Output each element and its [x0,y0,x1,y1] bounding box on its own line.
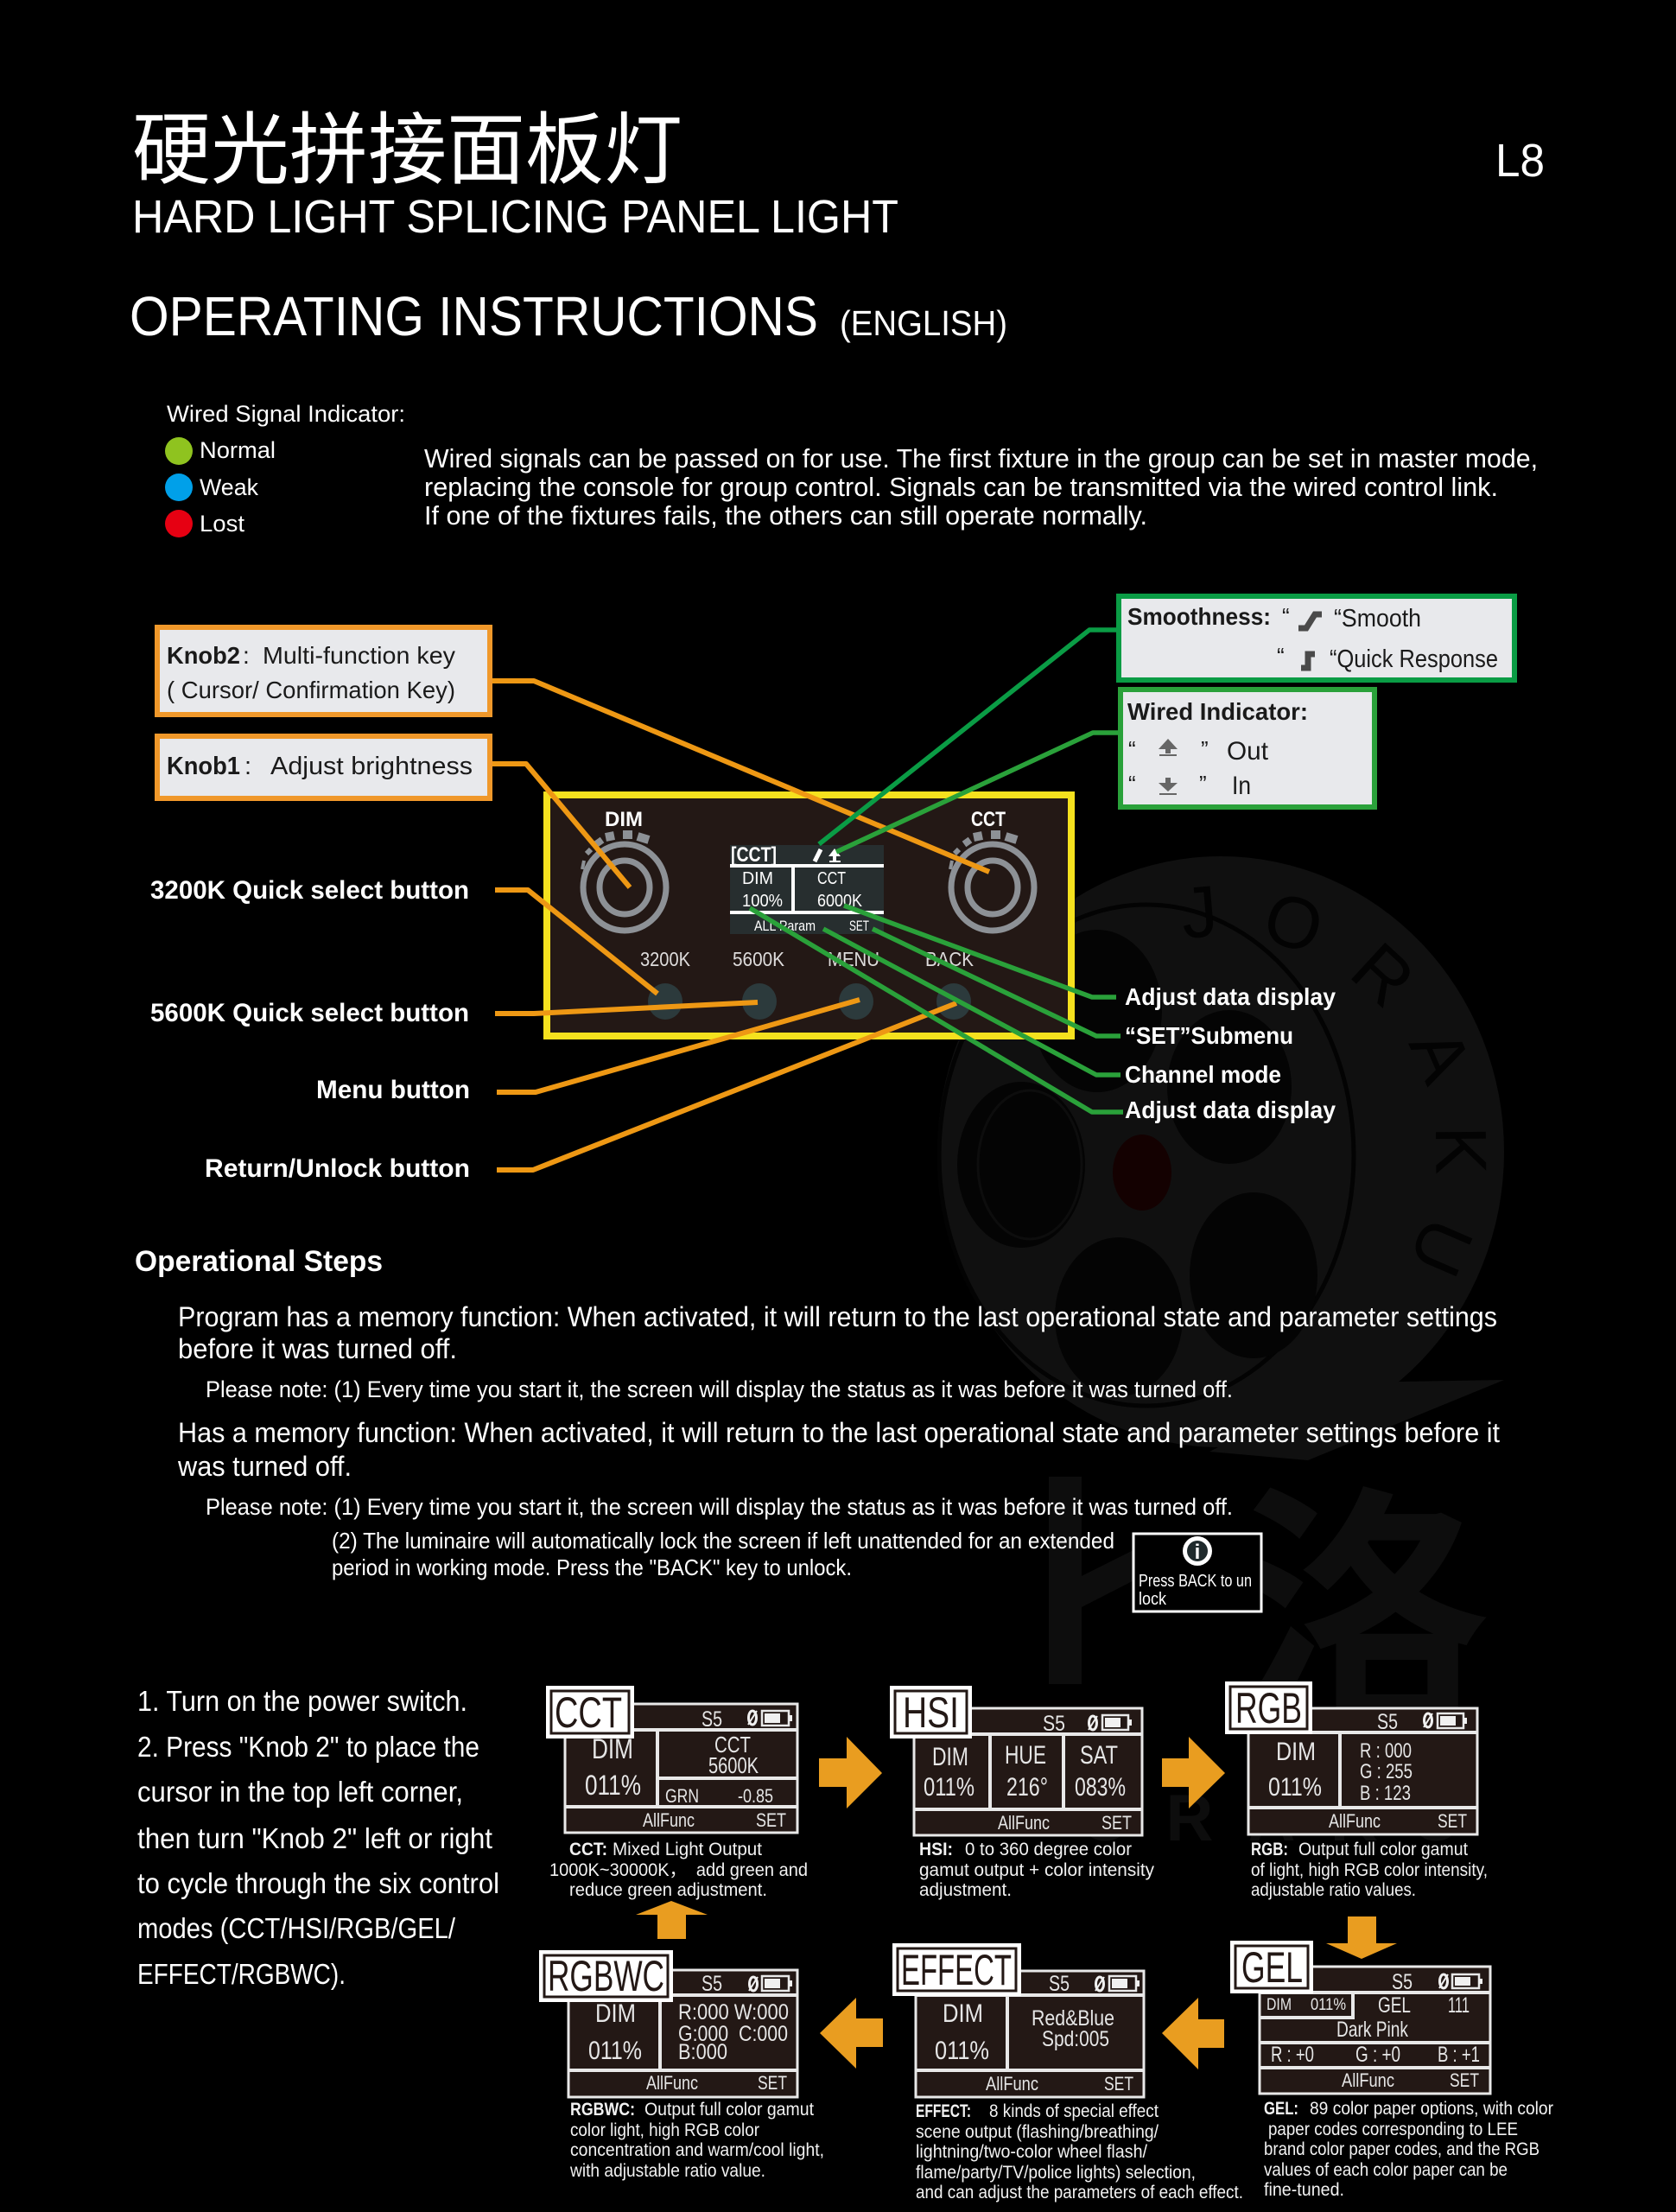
tag: GEL [1230,1941,1313,1993]
right labels: Channel mode [1125,1061,1281,1088]
text block: numbered steps: cursor in the top left corner, [137,1776,463,1808]
caption: RGBWC: with adjustable ratio value. [569,2161,765,2181]
mode panel: EFFECT: Spd:005 [1042,2027,1109,2051]
callout: smoothness [1119,596,1514,680]
icon: quick response step [1301,654,1315,668]
callout: wired indicator: ” [1201,736,1209,762]
display screen: ALL Param [754,918,816,934]
mode panel: RGBWC: G:000 C:000 [678,2022,788,2046]
mode panel: HSI: SAT [1080,1741,1118,1770]
tag: GEL: GEL [1241,1943,1303,1992]
mode panel: RGB: B : 123 [1360,1782,1411,1805]
mode panel: HSI: SET [1101,1812,1132,1834]
caption: HSI [919,1840,1154,1900]
caption: RGB: of light, high RGB color intensity, [1251,1860,1488,1880]
caption: HSI: adjustment. [919,1880,1012,1900]
buttons: 5600K [733,948,785,970]
mode panel: GEL: SET [1450,2069,1479,2091]
tag: RGB [1225,1681,1312,1734]
mode panel: HSI: HUE [1005,1741,1046,1770]
mode panel: RGBWC: 011% [588,2037,642,2065]
callout: smoothness: “Smooth [1334,605,1421,632]
mode panel: RGBWC: AllFunc [646,2072,698,2094]
mode panel: CCT: CCT [714,1732,751,1758]
mode panel: RGB: SET [1438,1810,1467,1832]
callout: wired indicator: “ [1128,736,1136,762]
mode panel: HSI: 216° [1006,1773,1048,1802]
mode panel: GEL: R : +0 [1271,2043,1314,2067]
caption: RGBWC: color light, high RGB color [570,2120,759,2140]
watermark: brand lettering: ORAKU [1080,1782,1460,1855]
callout: knob 2 [157,627,490,715]
legend: wired signal indicator: Lost [200,511,244,537]
model number: L8 [1495,135,1545,187]
display screen: CCT [817,869,846,888]
watermark: brand lettering [1049,1471,1490,1855]
mode panel: GEL [1230,1941,1490,2094]
knob: DIM [582,808,666,931]
right labels [1125,983,1336,1123]
mode panel: EFFECT: S5 [1049,1972,1070,1996]
text block: numbered steps: EFFECT/RGBWC). [137,1958,346,1990]
arrow: CCT to HSI [819,1737,882,1808]
lock notice box [1133,1534,1261,1611]
mode panel: GEL: AllFunc [1342,2069,1394,2091]
mode panel: EFFECT: SET [1104,2073,1133,2094]
left labels: 3200K Quick select button [150,876,469,905]
legend: wired signal indicator: Normal [200,437,276,463]
watermark: film reel logo [942,856,1504,1460]
caption: CCT: CCT: [569,1840,607,1859]
title: 硬光拼接面板灯 [132,107,682,194]
caption: RGBWC: concentration and warm/cool light, [570,2140,824,2160]
callout: knob 2: ( Cursor/ Confirmation Key) [167,677,455,703]
icon: arrow up [1159,739,1178,756]
mode panel: GEL: GEL [1378,1993,1411,2018]
mode panel: GEL: S5 [1392,1970,1413,1994]
callout: knob 1: : [244,753,251,780]
lock notice box: Press BACK to un [1139,1572,1252,1591]
text block: numbered steps: 1. Turn on the power switch. [137,1685,467,1717]
arrow: EFFECT to RGBWC [820,1998,883,2069]
text block: numbered steps: 2. Press "Knob 2" to place the [137,1731,479,1763]
display screen: 6000K [817,892,863,911]
caption: HSI: gamut output + color intensity [919,1860,1154,1880]
tag: EFFECT [892,1943,1021,1996]
mode panel: RGB: 011% [1268,1773,1322,1802]
tag: EFFECT: EFFECT [901,1946,1012,1994]
callout: wired indicator: ” [1199,771,1207,797]
caption: CCT: 1000K~30000K， add green and [549,1860,808,1880]
caption: GEL: GEL: [1264,2099,1298,2119]
icon: info: i [1195,1541,1200,1564]
arrow: RGBWC to CCT [636,1901,708,1939]
caption: EFFECT: 8 kinds of special effect [989,2101,1159,2121]
display screen: [CCT] [731,843,777,867]
display screen: 100% [742,892,783,911]
caption: RGB [1251,1840,1488,1900]
right labels: Adjust data display [1125,983,1336,1010]
control panel diagram [547,795,1071,1036]
heading: operational steps: Operational Steps [135,1245,383,1278]
mode panel: RGBWC: DIM [595,1999,636,2028]
text block: memory function: Program has a memory function: When activated, it will return to the last operational state and parameter settings [178,1301,1497,1332]
arrow: RGB to GEL [1326,1916,1397,1959]
mode panel: HSI: AllFunc [998,1812,1050,1834]
mode panel: RGB: R : 000 [1360,1739,1412,1763]
mode panel: CCT: SET [756,1809,786,1831]
title: HARD LIGHT SPLICING PANEL LIGHT [132,191,898,243]
mode panel: CCT [546,1686,797,1833]
display screen: DIM [742,869,773,888]
callout: knob 2: Multi-function key [263,642,455,669]
caption: CCT: Mixed Light Output [613,1840,762,1859]
display screen: SET [849,918,869,934]
heading: operating instructions: (ENGLISH) [840,303,1007,343]
icon: info [1183,1536,1212,1566]
tag: RGB: RGB [1235,1684,1302,1732]
mode panel: CCT: 011% [585,1770,641,1801]
caption: HSI: HSI: [919,1840,953,1859]
tag: RGBWC: RGBWC [548,1952,664,2000]
callout: smoothness: “Quick Response [1330,645,1498,673]
mode panel: CCT: DIM [592,1733,633,1764]
caption: RGB: Output full color gamut [1298,1840,1468,1859]
caption: EFFECT: flame/party/TV/police lights) selection, [916,2163,1196,2183]
text block: numbered steps: to cycle through the six control [137,1867,499,1899]
display screen [730,843,884,934]
mode panel: CCT: 5600K [708,1752,759,1778]
title [132,107,898,243]
caption: EFFECT: lightning/two-color wheel flash/ [916,2142,1147,2162]
mode panel: GEL: B : +1 [1438,2043,1480,2067]
mode panel: RGBWC [539,1950,797,2097]
mode panel: CCT: -0.85 [738,1785,773,1807]
left labels [150,876,470,1183]
left labels: Menu button [316,1076,470,1104]
callout: wired indicator: Out [1227,737,1269,766]
legend: wired signal indicator: Wired Signal Indicator: [167,401,405,427]
callout: wired indicator [1121,690,1374,807]
mode panel: GEL: 111 [1448,1993,1470,2018]
caption: GEL: fine-tuned. [1264,2180,1344,2200]
text block: wired signals [424,443,1538,531]
callout: smoothness: “ [1277,643,1285,669]
callout: wired indicator: In [1232,772,1251,800]
mode panel: GEL: DIM [1267,1996,1292,2014]
buttons: 3200K [640,948,691,970]
mode panel: CCT: S5 [702,1707,722,1732]
knob: CCT: CCT [971,808,1006,831]
caption: EFFECT [916,2101,1243,2202]
caption: GEL: 89 color paper options, with color [1310,2099,1553,2119]
text block: memory function: Please note: (1) Every time you start it, the screen will display the status as it was before it was turned off. [206,1494,1233,1520]
text block: memory function: before it was turned off. [178,1333,457,1364]
buttons: BACK [925,948,974,970]
text block: numbered steps [137,1685,499,1990]
callout: knob 1: Knob1 [167,753,240,780]
mode panel: RGB [1225,1681,1477,1834]
mode panel: RGBWC: B:000 [678,2040,727,2064]
callout: knob 2: : [243,642,250,669]
mode panel: GEL: 011% [1311,1996,1346,2014]
text block: memory function: (2) The luminaire will automatically lock the screen if left unattended for an extended [332,1528,1114,1554]
legend: wired signal indicator: Weak [200,474,258,500]
caption: HSI: 0 to 360 degree color [965,1840,1132,1859]
mode panel: CCT: AllFunc [643,1809,695,1831]
mode panel: RGB: G : 255 [1360,1760,1413,1783]
text block: numbered steps: modes (CCT/HSI/RGB/GEL/ [137,1912,456,1944]
knob: DIM: DIM [605,808,643,831]
text block: wired signals: If one of the fixtures fails, the others can still operate normally. [424,500,1147,531]
caption: GEL: values of each color paper can be [1264,2160,1508,2180]
legend: wired signal indicator [165,401,405,537]
mode panel: RGB: S5 [1377,1710,1398,1734]
orange leader lines [492,681,989,1170]
text block: memory function: was turned off. [177,1451,352,1482]
heading: operating instructions: OPERATING INSTRUCTIONS [130,285,818,347]
callout: knob 1: Adjust brightness [270,753,473,780]
caption: CCT [549,1840,808,1900]
caption: CCT: reduce green adjustment. [569,1880,767,1900]
mode panel: EFFECT: Red&Blue [1032,2006,1114,2031]
tag: HSI: HSI [903,1688,959,1737]
caption: EFFECT: and can adjust the parameters of each effect. [916,2183,1243,2202]
icon: smooth curve [1298,614,1322,628]
text block: memory function: Has a memory function: When activated, it will return to the last operational state and parameter settings before it [178,1417,1500,1448]
callout: knob 2: Knob2 [167,642,240,669]
mode panel: RGB: AllFunc [1329,1810,1381,1832]
caption: GEL [1264,2099,1553,2200]
arrow: HSI to RGB [1162,1737,1225,1808]
mode panel: EFFECT [892,1943,1144,2097]
callout: knob 1 [157,736,490,798]
callout: wired indicator: “ [1128,771,1136,797]
callout: wired indicator: Wired Indicator: [1127,698,1308,725]
icon: arrow down [1159,778,1178,795]
mode panel: GEL: Dark Pink [1336,2018,1408,2042]
mode panel: EFFECT: AllFunc [986,2073,1038,2094]
mode panel: HSI: 011% [924,1773,974,1802]
mode panel: HSI: DIM [932,1743,968,1771]
caption: EFFECT: scene output (flashing/breathing/ [916,2122,1159,2142]
buttons: MENU [828,948,879,970]
caption: GEL: paper codes corresponding to LEE [1268,2120,1518,2139]
mode panel: EFFECT: DIM [943,1999,983,2028]
right labels: Adjust data display [1125,1096,1336,1123]
watermark: film reel logo: JORAKU [1184,887,1486,1276]
caption: RGB: adjustable ratio values. [1251,1880,1416,1900]
caption: RGBWC: RGBWC: [570,2100,635,2120]
text block: wired signals: replacing the console for group control. Signals can be transmitted via the wired control link. [424,472,1498,502]
arrow: GEL to EFFECT [1162,1998,1224,2069]
text block: memory function [177,1301,1500,1580]
text block: memory function: Please note: (1) Every time you start it, the screen will display the status as it was before it was turned off. [206,1376,1233,1402]
mode panel: RGB: DIM [1276,1738,1316,1766]
caption: EFFECT: EFFECT: [916,2101,971,2121]
mode panel: HSI: 083% [1075,1773,1126,1802]
knob: CCT [950,808,1034,931]
caption: RGBWC: Output full color gamut [644,2100,814,2120]
text block: memory function: period in working mode. Press the "BACK" key to unlock. [332,1554,852,1580]
buttons [640,948,974,1020]
mode panel: HSI [890,1686,1142,1835]
lock notice box: lock [1139,1590,1167,1609]
mode panel: HSI: S5 [1043,1712,1065,1736]
mode panel: RGBWC: SET [758,2072,787,2094]
text block: numbered steps: then turn "Knob 2" left or right [137,1822,492,1854]
left labels: 5600K Quick select button [150,999,469,1027]
caption: RGBWC [569,2100,824,2181]
watermark: brand lettering: 洛 [1231,1471,1490,1762]
mode panel: GEL: G : +0 [1355,2043,1400,2067]
tag: CCT: CCT [555,1688,622,1737]
caption: RGB: RGB: [1251,1840,1288,1859]
text block: wired signals: Wired signals can be passed on for use. The first fixture in the group can be set in master mode, [424,443,1538,474]
right labels: “SET”Submenu [1125,1022,1293,1049]
mode panel: RGBWC: R:000 W:000 [678,2000,789,2024]
mode panel: RGBWC: S5 [702,1972,722,1996]
green leader lines [750,630,1123,1112]
tag: RGBWC [539,1950,673,2002]
callout: smoothness: “ [1282,603,1290,629]
mode panel: CCT: GRN [665,1785,699,1807]
callout: smoothness: Smoothness: [1127,603,1271,630]
caption: GEL: brand color paper codes, and the RGB [1264,2139,1540,2159]
left labels: Return/Unlock button [205,1154,470,1183]
mode panel: EFFECT: 011% [935,2037,989,2065]
